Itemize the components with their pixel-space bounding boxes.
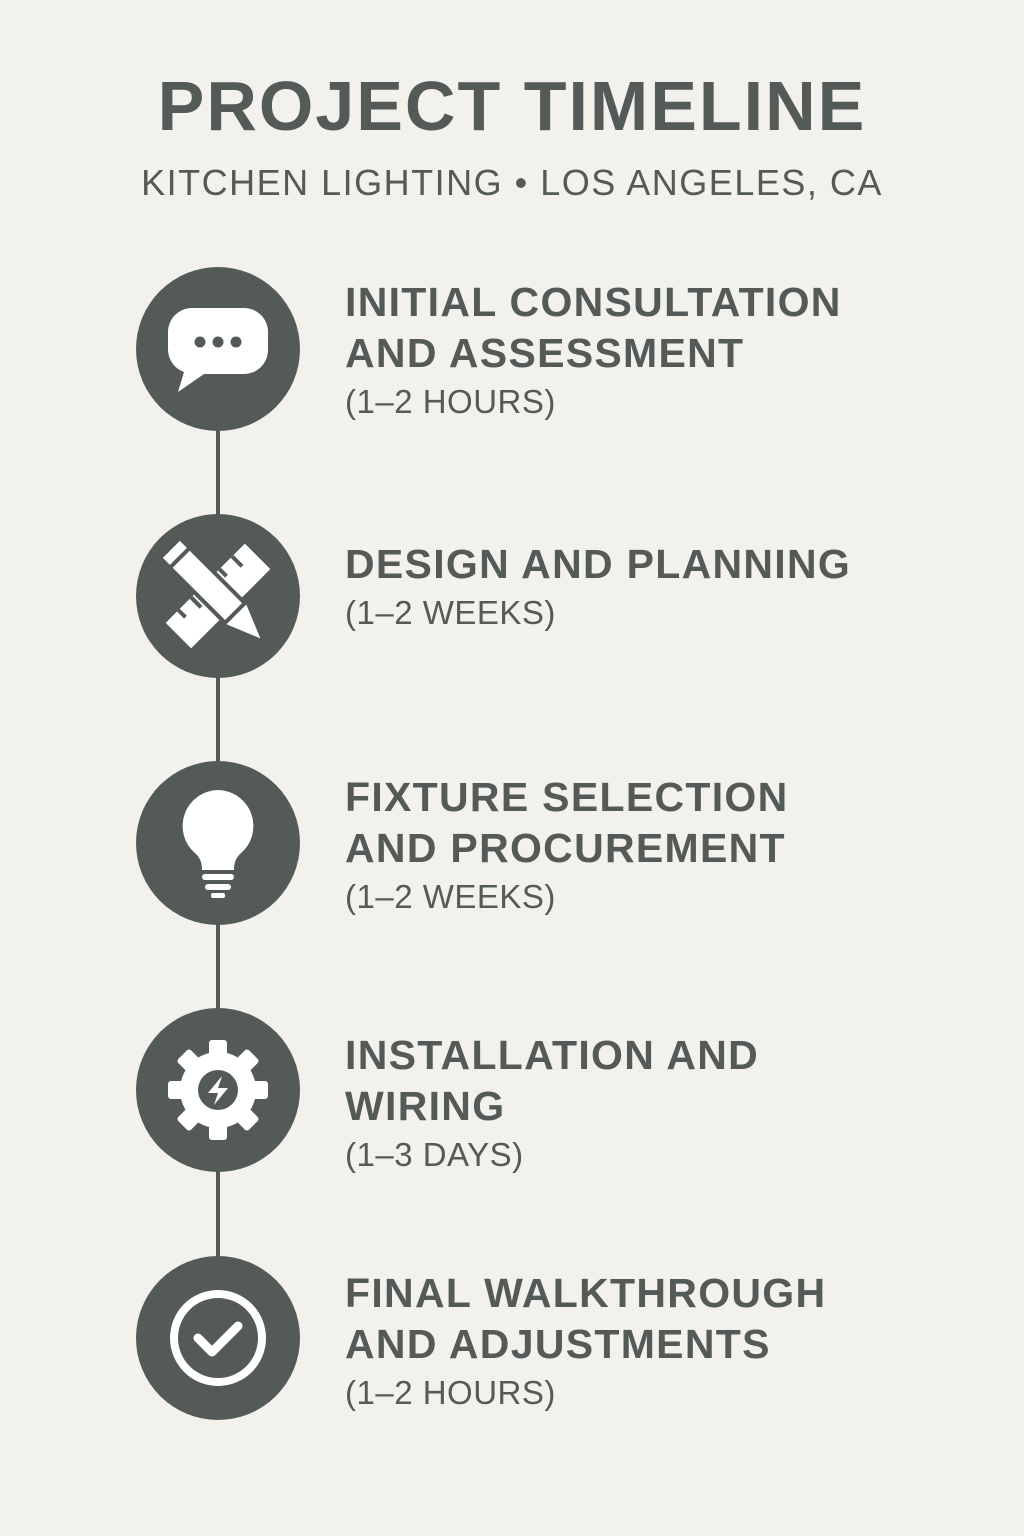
step 2 text — [345, 541, 851, 631]
step 4 text: (1–3 DAYS) — [345, 1136, 524, 1173]
step 2 text: DESIGN AND PLANNING — [345, 541, 851, 587]
icon: gear with bolt — [136, 1008, 300, 1172]
step 5 text: AND ADJUSTMENTS — [345, 1321, 771, 1367]
step 3 text: AND PROCUREMENT — [345, 825, 786, 871]
step 5 text — [345, 1270, 826, 1411]
step 1 text: (1–2 HOURS) — [345, 383, 556, 420]
timeline graphic — [136, 267, 300, 1420]
step 4 text: INSTALLATION AND — [345, 1032, 759, 1078]
step 1 text: INITIAL CONSULTATION — [345, 279, 842, 325]
title: PROJECT TIMELINE — [158, 67, 866, 145]
connector line — [216, 420, 220, 1270]
icon: light bulb — [136, 761, 300, 925]
icon: speech bubble — [136, 267, 300, 431]
step 5 text: FINAL WALKTHROUGH — [345, 1270, 826, 1316]
step 2 text: (1–2 WEEKS) — [345, 594, 556, 631]
step 1 text: AND ASSESSMENT — [345, 330, 744, 376]
subtitle: KITCHEN LIGHTING • LOS ANGELES, CA — [141, 162, 883, 203]
icon: check circle — [136, 1256, 300, 1420]
step 4 text: WIRING — [345, 1083, 505, 1129]
step 4 text — [345, 1032, 759, 1173]
step 3 text: FIXTURE SELECTION — [345, 774, 789, 820]
step 5 text: (1–2 HOURS) — [345, 1374, 556, 1411]
step 3 text: (1–2 WEEKS) — [345, 878, 556, 915]
step 1 text — [345, 279, 842, 420]
icon: pencil and ruler — [136, 514, 300, 678]
step 3 text — [345, 774, 789, 915]
